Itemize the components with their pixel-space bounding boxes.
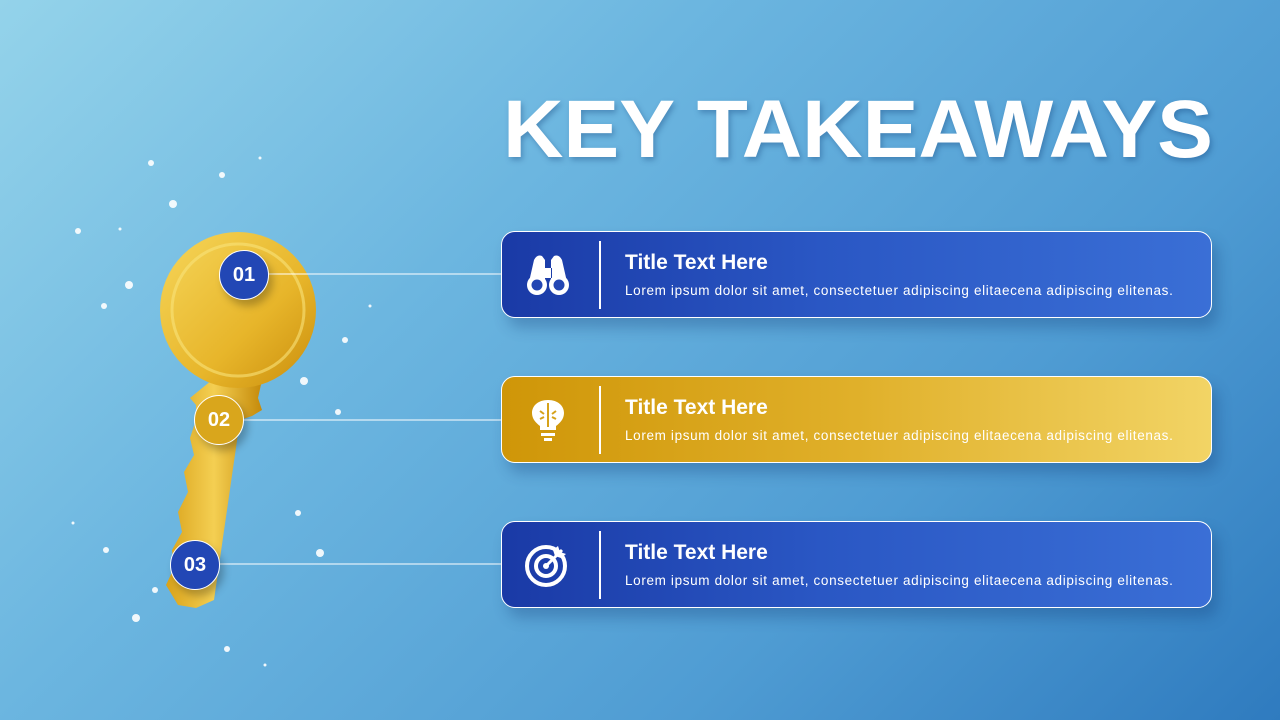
card 3 — [501, 521, 1212, 608]
card 1: Lorem ipsum dolor sit amet, consectetuer adipiscing elitaecena adipiscing elitenas. — [625, 283, 1173, 298]
card 1 — [501, 231, 1212, 318]
card 2 — [501, 376, 1212, 463]
card 3: Title Text Here — [625, 541, 768, 564]
card 1: Title Text Here — [625, 251, 768, 274]
icon: target — [525, 545, 567, 587]
key head — [160, 232, 316, 388]
badge 03: 03 — [184, 554, 206, 576]
icon: binoculars — [527, 256, 569, 295]
badge 01 — [219, 250, 269, 300]
badge 03 — [170, 540, 220, 590]
badge 02 — [194, 395, 244, 445]
card 2: Lorem ipsum dolor sit amet, consectetuer adipiscing elitaecena adipiscing elitenas. — [625, 428, 1173, 443]
badge 02: 02 — [208, 409, 230, 431]
badge 01: 01 — [233, 264, 255, 286]
icon: brain bulb — [532, 400, 564, 441]
card 3: Lorem ipsum dolor sit amet, consectetuer adipiscing elitaecena adipiscing elitenas. — [625, 573, 1173, 588]
title: KEY TAKEAWAYS — [503, 84, 1213, 175]
key illustration — [72, 156, 501, 666]
card 2: Title Text Here — [625, 396, 768, 419]
key shaft — [166, 380, 262, 608]
